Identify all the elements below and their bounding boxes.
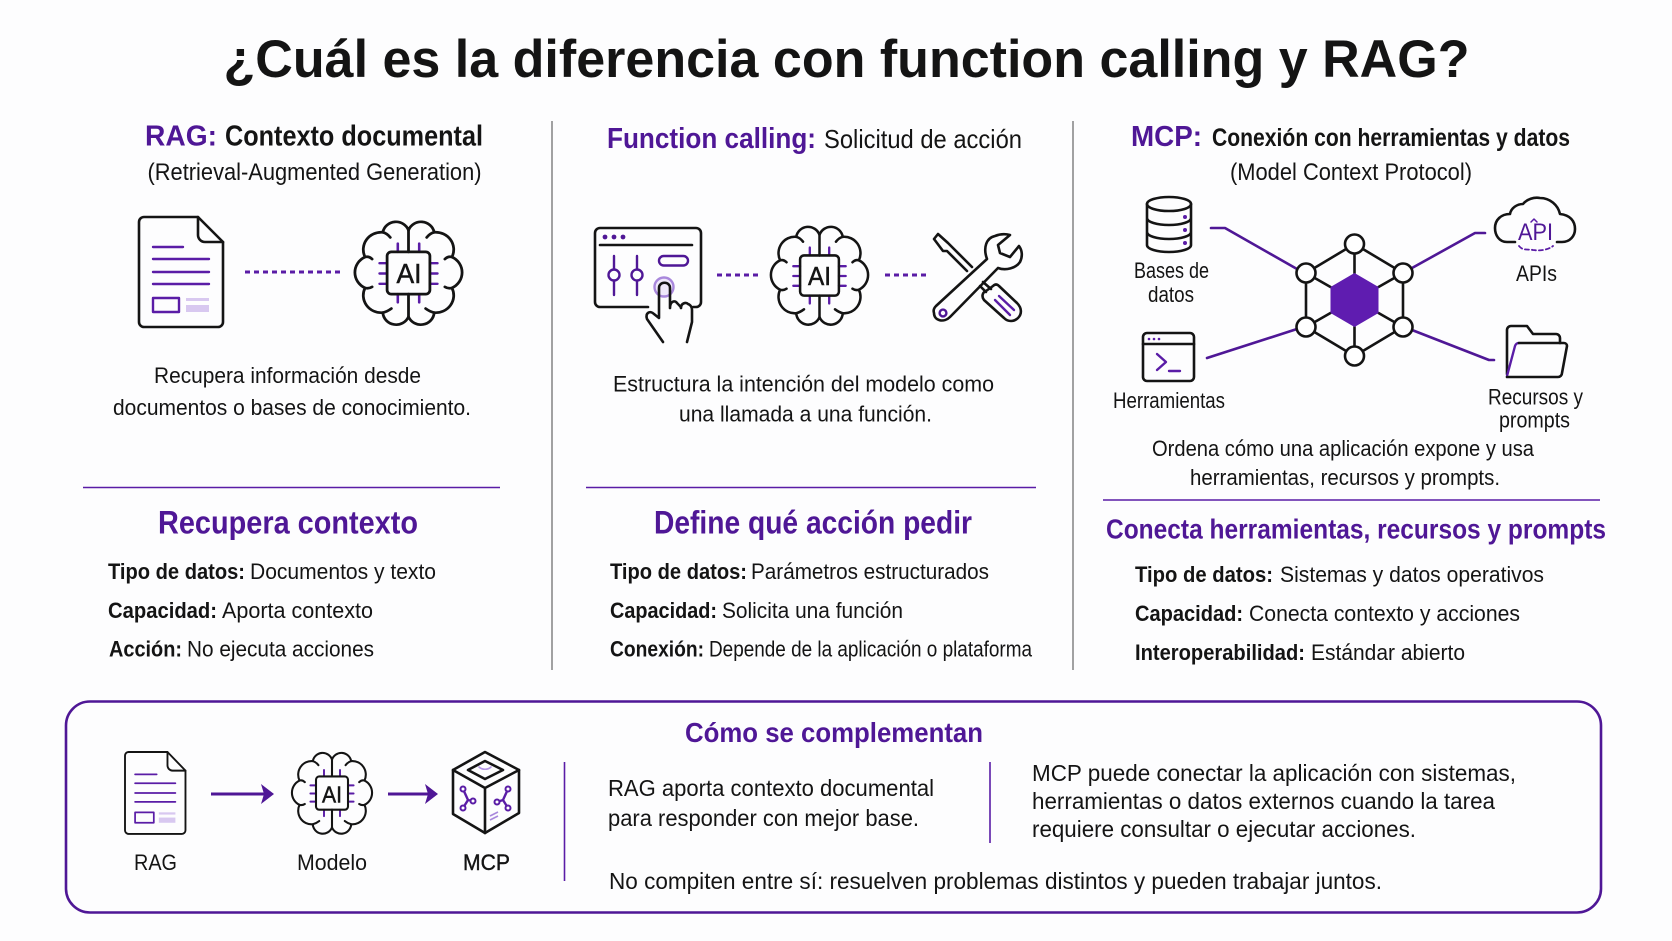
icon: model brain — [292, 753, 372, 834]
details: MCP: Tipo de datos: — [1135, 562, 1273, 587]
icon: AI brain — [771, 227, 868, 325]
description: Function calling: una llamada a una función. — [679, 402, 932, 426]
heading: Function calling: Function calling: — [607, 123, 816, 155]
heading: Function calling — [607, 123, 1022, 155]
panel: RAG — [83, 120, 500, 662]
label: Bases de datos — [1134, 258, 1209, 307]
description: Function calling — [613, 372, 994, 426]
dotted connector — [885, 274, 926, 276]
hub: hexagon network — [1296, 234, 1412, 366]
connector lines — [1207, 228, 1494, 360]
text: MCP puede conectar: requiere consultar o ejecutar acciones. — [1032, 816, 1416, 842]
dotted connector — [717, 274, 758, 276]
icon: AI brain: AI — [396, 258, 422, 289]
description: RAG: documentos o bases de conocimiento. — [113, 395, 471, 420]
dotted connector — [245, 270, 340, 274]
details: RAG: Tipo de datos: — [108, 559, 245, 584]
description: MCP: Ordena cómo una aplicación expone y usa — [1152, 436, 1535, 461]
icon: folder — [1507, 326, 1567, 377]
description: MCP: herramientas, recursos y prompts. — [1190, 465, 1500, 490]
panel: Function calling — [586, 123, 1036, 662]
heading: Function calling: Solicitud de acción — [824, 124, 1022, 154]
description: MCP — [1152, 436, 1535, 490]
icon: tools — [934, 234, 1022, 321]
arrow: RAG to model — [211, 784, 274, 804]
subtitle: Conecta herramientas, recursos y prompts: Conecta herramientas, recursos y prompts — [1106, 514, 1606, 544]
text: RAG aporta contexto: RAG aporta contexto documental — [608, 775, 934, 801]
description: RAG — [113, 363, 471, 420]
details: MCP: Capacidad: — [1135, 601, 1243, 626]
heading: MCP — [1131, 121, 1570, 153]
details: MCP: Sistemas y datos operativos — [1280, 562, 1544, 587]
heading: RAG: RAG: — [145, 120, 217, 152]
title: ¿Cuál es la diferencia con function calling y RAG? — [224, 30, 1470, 89]
details: MCP: Conecta contexto y acciones — [1249, 601, 1520, 626]
labels: flow — [134, 850, 510, 875]
icon: AI brain: AI — [808, 261, 831, 291]
heading: RAG — [145, 120, 483, 152]
details: MCP: Estándar abierto — [1311, 640, 1465, 665]
labels: flow: RAG — [134, 850, 177, 875]
heading: RAG: Contexto documental — [225, 120, 483, 152]
text: RAG aporta contexto — [608, 775, 934, 831]
details: Function calling: Solicita una función — [722, 598, 903, 623]
details: Function calling: Conexión: — [610, 636, 704, 662]
details: MCP: Interoperabilidad: — [1135, 640, 1305, 665]
heading: MCP: Conexión con herramientas y datos — [1212, 124, 1570, 152]
details: RAG: No ejecuta acciones — [187, 636, 374, 662]
labels: flow: MCP — [463, 850, 510, 875]
icon: model brain: AI — [322, 782, 342, 808]
text: MCP puede conectar — [1032, 760, 1516, 842]
subheading: RAG: (Retrieval-Augmented Generation) — [148, 159, 482, 186]
details: RAG: Aporta contexto — [222, 598, 373, 623]
details: Function calling: Depende de la aplicación o plataforma — [709, 636, 1032, 662]
icon: API cloud: API — [1518, 219, 1553, 246]
label: Herramientas: Herramientas — [1113, 388, 1225, 413]
panel: MCP — [1103, 121, 1606, 665]
label: Recursos y prompts — [1488, 384, 1584, 432]
details: RAG — [108, 559, 436, 662]
label: APIs: APIs — [1516, 261, 1557, 286]
details: Function calling: Capacidad: — [610, 598, 717, 623]
icon: API cloud — [1495, 198, 1575, 250]
label: Bases de datos: datos — [1148, 282, 1194, 307]
label: Recursos y prompts: Recursos y — [1488, 384, 1584, 410]
heading: MCP: MCP: — [1131, 121, 1202, 153]
details: Function calling: Parámetros estructurados — [751, 559, 989, 584]
icon: terminal — [1143, 333, 1194, 381]
icon: MCP cube — [453, 752, 519, 833]
label: Bases de datos: Bases de — [1134, 258, 1209, 283]
subtitle: Recupera contexto: Recupera contexto — [158, 504, 418, 540]
subtitle: Define qué acción pedir: Define qué acción pedir — [654, 504, 972, 540]
arrow: model to MCP — [388, 784, 438, 804]
heading: Cómo se complementan: Cómo se complementan — [685, 717, 983, 748]
details: RAG: Documentos y texto — [250, 559, 436, 584]
details: RAG: Capacidad: — [108, 598, 217, 623]
icon: database — [1147, 197, 1191, 252]
icon: RAG document — [125, 752, 185, 834]
text: RAG aporta contexto: para responder con mejor base. — [608, 805, 919, 831]
labels: flow: Modelo — [297, 850, 367, 875]
details: Function calling — [610, 559, 1032, 662]
details: MCP — [1135, 562, 1544, 665]
icon: control window with hand — [595, 228, 701, 342]
icon: AI brain — [355, 222, 462, 325]
panel: Cómo se complementan — [66, 702, 1601, 912]
text: MCP puede conectar: herramientas o datos externos cuando la tarea — [1032, 788, 1495, 814]
details: Function calling: Tipo de datos: — [610, 559, 747, 584]
label: Recursos y prompts: prompts — [1499, 408, 1570, 432]
subheading: MCP: (Model Context Protocol) — [1230, 159, 1472, 186]
text: MCP puede conectar: MCP puede conectar la aplicación con sistemas, — [1032, 760, 1516, 786]
text: conclusion: No compiten entre sí: resuelven problemas distintos y pueden trabajar juntos. — [609, 868, 1382, 894]
description: RAG: Recupera información desde — [154, 363, 421, 388]
details: RAG: Acción: — [109, 636, 182, 662]
icon: document — [139, 217, 223, 327]
description: Function calling: Estructura la intención del modelo como — [613, 372, 994, 396]
